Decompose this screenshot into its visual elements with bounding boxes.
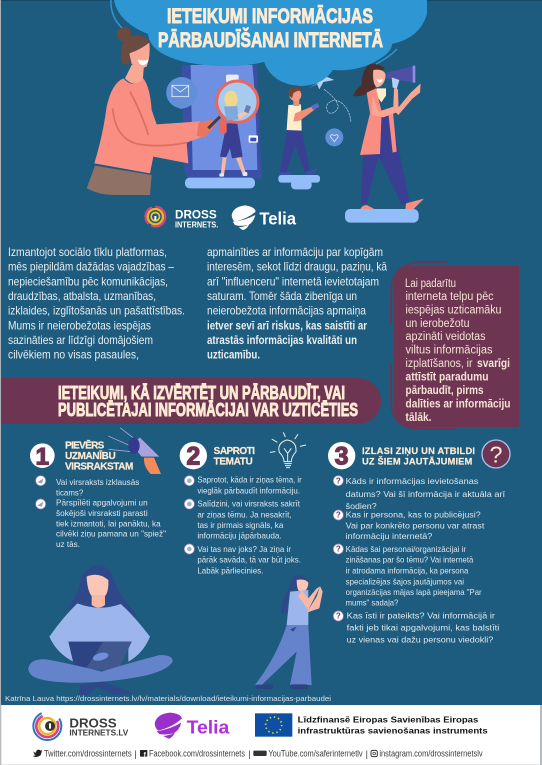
step 1 heading [65, 439, 133, 473]
intro text column 1: Izmantojot sociālo tīklu platformas, [8, 245, 167, 259]
number 2: 2 [186, 443, 200, 470]
logo: Dross Internets: DROSS [175, 207, 217, 221]
icon: message envelope bubble [166, 77, 197, 109]
step 1 heading: VIRSRAKSTAM [65, 462, 133, 473]
intro text column 1: Mums ir neierobežotas iespējas [8, 318, 151, 332]
logo: Telia: Telia [187, 717, 230, 738]
social links: Facebook.com/drossinternets [149, 749, 245, 759]
step 3 text: Vai par konkrēto personu var atrast [346, 520, 485, 530]
step 3 heading: UZ ŠIEM JAUTĀJUMIEM [362, 456, 473, 467]
intro text column 2: apmainīties ar informāciju par kopīgām [207, 245, 383, 259]
social links: | [134, 749, 137, 759]
source caption: Katrīna Lauva https://drossinternets.lv/lv/materials/download/ieteikumi-informacijas-parbaudei [5, 694, 331, 703]
intro text column 2: arī "influenceru" internetā ievietotajam [207, 274, 379, 288]
step 2 text: informāciju jāpārbauda. [197, 531, 282, 541]
footer [0, 705, 542, 765]
step 3 text: ir atrodama informācija, ka persona [346, 566, 469, 576]
step 3 text: Kas ir persona, kas to publicējusi? [346, 510, 481, 520]
logo: Dross Internets [33, 712, 129, 740]
number 3: 3 [335, 443, 349, 470]
logo: Dross Internets: INTERNETS.LV [69, 727, 129, 737]
funding statement: infrastruktūras savienošanas instruments [298, 726, 488, 736]
funding statement: Līdzfinansē Eiropas Savienības Eiropas [298, 715, 479, 725]
title [158, 5, 383, 52]
step 3 heading: IZLASI ZIŅU UN ATBILDI [362, 446, 475, 456]
social links [33, 749, 483, 759]
step 2 [180, 432, 306, 575]
social links: YouTube.com/saferinternetlv [268, 749, 363, 759]
girl on phone legs [219, 118, 247, 177]
man base [278, 175, 320, 189]
step 2 heading: SAPROTI [214, 446, 255, 457]
left woman skirt [87, 166, 152, 195]
social links: instagram.com/drossinternetslv [379, 749, 483, 759]
step 3 [328, 440, 510, 645]
callout text [405, 278, 510, 424]
callout text: svarīgi [477, 358, 510, 370]
panel: callout [391, 262, 519, 429]
step 3 text: organizācijas mājas lapā pieejama "Par [346, 587, 482, 597]
intro text column 2 [207, 245, 387, 362]
step 2 text: vieglāk pārbaudīt informāciju. [197, 485, 300, 495]
number 3 [328, 442, 355, 470]
social links: Twitter.com/drossinternets [44, 749, 132, 759]
logo: Telia: Telia [259, 208, 296, 228]
step 2 text: Vai tas nav joks? Ja ziņa ir [197, 544, 291, 554]
step 3 bullets: ? [336, 511, 341, 520]
intro text column 1: nepieciešamību pēc komunikācijas, [8, 274, 168, 288]
logo: Dross Internets: DROSS [69, 716, 117, 730]
step 3 text: mums" sadaļa? [346, 598, 399, 608]
step 1 text: šokējoši virsraksti parasti [56, 508, 148, 518]
intro text column 2: ietver sevī arī riskus, kas saistīti ar [207, 318, 367, 332]
step 2 text: Salīdzini, vai virsraksts sakrīt [197, 499, 301, 509]
intro text column 2: saturam. Tomēr šāda zibenīga un [207, 289, 357, 303]
step 3 bullets [333, 476, 343, 621]
intro text column 1: cilvēkiem no visas pasaules, [8, 348, 139, 362]
step 3 text: Kas īsti ir pateikts? Vai informācijā ir [347, 611, 495, 621]
step 1 heading: UZMANĪBU [65, 450, 116, 462]
logo: Telia [232, 205, 296, 230]
phone base [185, 178, 255, 188]
step 3 heading [362, 446, 475, 467]
step 1 text: uz tās. [56, 539, 80, 549]
left woman [94, 27, 217, 173]
megaphone woman [353, 64, 424, 211]
icon: phone [182, 65, 262, 178]
step 2 bullets [184, 476, 194, 554]
step 2 heading [214, 446, 255, 467]
callout text: un ierobežotu [406, 318, 470, 330]
icon: question mark [482, 440, 510, 468]
title: PĀRBAUDĪŠANAI INTERNETĀ [158, 28, 383, 52]
step 2 text [197, 475, 302, 575]
step 3 bullets: ? [336, 545, 341, 554]
step 1 heading: PIEVĒRS [65, 439, 105, 451]
callout text: apzināti veidotas [406, 331, 486, 343]
callout text: Lai padarītu [405, 278, 456, 290]
step 3 text: uz vienas vai dažu personu viedokli? [347, 635, 494, 645]
icon: question mark: ? [490, 441, 503, 467]
intro text column 1: izklaides, izglītošanās un pašattīstības. [8, 304, 185, 318]
logo: Telia [155, 713, 230, 739]
intro text column 1: draudzības, atbalsta, uzmanības, [8, 289, 156, 303]
step 2 text: Saprotot, kāda ir ziņas tēma, ir [197, 475, 302, 485]
standing woman [255, 575, 323, 689]
icon: paper plane [308, 69, 351, 122]
intro text column 2: uzticamību. [207, 348, 260, 362]
intro text column 1 [8, 245, 185, 362]
man with phone [279, 87, 319, 177]
step 1 text: tiek izmantoti, lai panāktu, ka [56, 518, 161, 528]
social links: | [366, 749, 368, 759]
callout text: iespējas uzticamāku [406, 304, 502, 316]
step 3 bullets: ? [336, 612, 341, 621]
callout text: viltus informācijas [406, 344, 493, 356]
callout text: tālāk. [406, 412, 432, 424]
step 2 text: tas ir pirmais signāls, ka [197, 520, 284, 530]
title: IETEIKUMI INFORMĀCIJAS [167, 5, 373, 28]
step 1 text: Pārspīlēti apgalvojumi un [56, 498, 148, 508]
step 3 text: Kāds ir informācijas ievietošanas [346, 476, 478, 486]
callout text: attīstīt paradumu [406, 372, 488, 384]
step 3 text [346, 476, 506, 645]
number 2 [180, 442, 207, 470]
cloud title background [111, 0, 427, 86]
step 3 bullets: ? [336, 476, 341, 485]
banner heading: PUBLICĒTAJAI INFORMĀCIJAI VAR UZTICĒTIES [58, 399, 358, 420]
step 2 text: Labāk pārliecinies. [197, 565, 263, 575]
social links: f [144, 752, 147, 759]
intro text column 2: neierobežota informācijas apmaiņa [207, 304, 366, 318]
step 1 bullets [36, 476, 46, 509]
step 1 text: cilvēki ziņu pamana un "spiež" [56, 529, 166, 539]
step 3 text: datums? Vai šī informācija ir aktuāla arī [346, 489, 506, 499]
step 2 text: pārāk savāda, tā var būt joks. [197, 555, 301, 565]
icon: small camera tag [226, 75, 258, 143]
logo: Dross Internets: INTERNETS. [175, 219, 218, 229]
step 1 text: Vai virsraksts izklausās [56, 477, 139, 487]
callout text: dalīties ar informāciju [406, 398, 510, 410]
step 2 heading: TEMATU [214, 456, 253, 467]
icon: magnifying glass [208, 81, 258, 128]
banner heading [1, 378, 381, 424]
right figure base [345, 209, 419, 223]
hero illustration [87, 27, 424, 230]
callout text: izplatīšanos, ir [406, 358, 473, 370]
icon: heart bubble [325, 128, 343, 146]
icon: EU flag [255, 713, 292, 737]
step 3 text: informāciju internetā? [346, 531, 433, 541]
funding statement [298, 715, 488, 736]
banner heading: IETEIKUMI, KĀ IZVĒRTĒT UN PĀRBAUDĪT, VAI [58, 382, 345, 403]
step 3 text: fakti jeb tikai apgalvojumi, kas balstīti [347, 623, 499, 633]
number 1: 1 [36, 443, 49, 470]
step 1 [30, 428, 166, 549]
step 3 text: Kādas šai personai/organizācijai ir [346, 544, 466, 554]
step 1 text [56, 477, 166, 549]
logo: Dross Internets [145, 207, 218, 229]
social links: | [248, 749, 251, 759]
icon: megaphone [108, 428, 161, 474]
callout text: pārbaudīt, pirms [406, 385, 484, 397]
intro text column 2: interesēm, sekot līdzi draugu, paziņu, kā [207, 260, 387, 274]
step 1 text: ticams? [56, 487, 84, 497]
callout text: interneta telpu pēc [406, 291, 494, 303]
step 3 text: šodien? [346, 501, 377, 511]
intro text column 2: atrastās informācijas kvalitāti un [207, 333, 357, 347]
icon: light bulb [270, 432, 306, 468]
step 3 text: specializējas šajos jautājumos vai [346, 576, 464, 586]
intro text column 1: mēs piepildām dažādas vajadzības – [8, 260, 174, 274]
woman with laptop [28, 565, 173, 695]
step 2 text: ar ziņas tēmu. Ja nesakrīt, [197, 509, 292, 519]
intro text column 1: sazināties ar līdzīgi domājošiem [8, 333, 153, 347]
step 3 text: zināšanas par šo tēmu? Vai internetā [346, 555, 474, 565]
